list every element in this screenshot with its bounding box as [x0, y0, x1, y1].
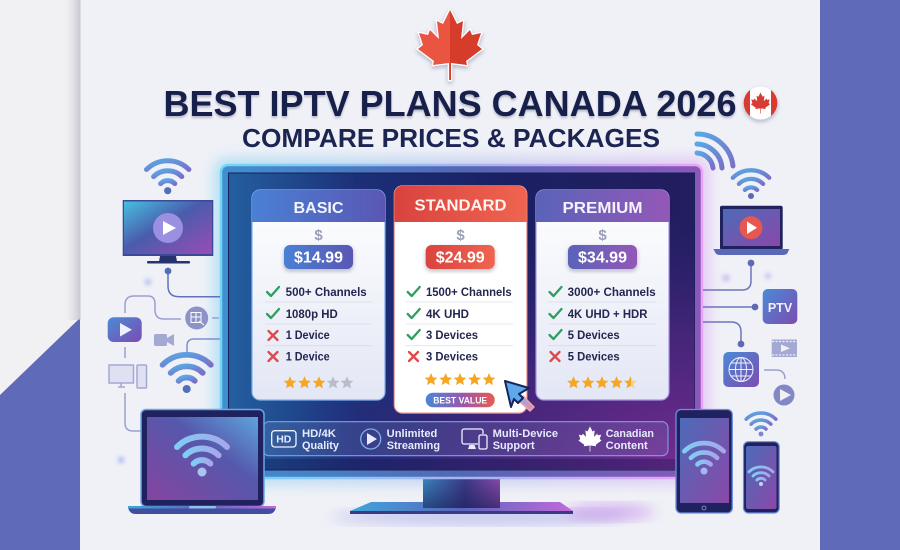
- premium name: PREMIUM: [562, 200, 642, 217]
- icon: phone: [744, 442, 779, 513]
- feature: canadian content: Canadian: [606, 428, 654, 440]
- panel: standard plan: [394, 186, 527, 413]
- icon: play circle: [774, 384, 794, 406]
- icon: wifi above laptop: [733, 170, 769, 199]
- feature: unlimited streaming: [361, 428, 440, 452]
- icon: globe badge: [185, 306, 208, 330]
- feature: multi-device support: Support: [493, 440, 535, 452]
- icon: maple leaf: [418, 10, 482, 80]
- basic features: 1080p HD: [286, 309, 338, 321]
- standard price: $24.99: [436, 250, 485, 266]
- icon: right laptop with play: [713, 206, 789, 255]
- feature: hd quality: HD: [276, 434, 292, 446]
- panel: basic plan: [252, 190, 385, 400]
- feature: unlimited streaming: Streaming: [387, 440, 440, 452]
- icon: wifi above tv: [146, 161, 189, 194]
- standard features: 4K UHD: [426, 309, 469, 321]
- basic features: 500+ Channels: [286, 287, 367, 299]
- basic name: BASIC: [294, 200, 344, 217]
- standard price: [426, 245, 495, 269]
- best value badge: BEST VALUE: [433, 395, 487, 405]
- feature: canadian content: Content: [606, 440, 648, 452]
- monitor stand: [350, 478, 573, 514]
- basic header: [252, 190, 385, 222]
- feature: hd quality: Quality: [302, 440, 340, 452]
- feature: hd quality: [272, 428, 340, 452]
- basic price: $14.99: [294, 250, 343, 266]
- premium dollar: $: [598, 227, 607, 244]
- basic features: 1 Device: [286, 352, 330, 364]
- standard name: STANDARD: [414, 198, 506, 215]
- premium price: $34.99: [578, 250, 627, 266]
- basic rating stars: [284, 376, 353, 388]
- basic dollar: $: [314, 227, 323, 244]
- icon: canadian flag badge: [744, 86, 777, 120]
- icon: left laptop: [128, 410, 276, 514]
- feature: unlimited streaming: Unlimited: [387, 428, 437, 440]
- connector lines: [125, 263, 785, 431]
- feature: hd quality: HD/4K: [302, 428, 336, 440]
- basic price: [284, 245, 353, 269]
- basic features: [265, 287, 372, 364]
- standard header: [394, 186, 527, 222]
- icon: video tile: [108, 317, 142, 342]
- standard features: [406, 287, 513, 364]
- feature: multi-device support: Multi-Device: [493, 428, 558, 440]
- icon: globe tile: [723, 352, 759, 387]
- premium features: 5 Devices: [568, 352, 620, 364]
- icon: tablet: [676, 410, 732, 513]
- premium features: 5 Devices: [568, 330, 620, 342]
- icon: camera: [154, 334, 174, 346]
- basic features: 1 Device: [286, 330, 330, 342]
- premium header: [536, 190, 669, 222]
- monitor glow: [214, 158, 709, 484]
- premium price: [568, 245, 637, 269]
- subtitle: COMPARE PRICES & PACKAGES: [242, 123, 660, 153]
- best value badge: [426, 393, 495, 407]
- monitor: [221, 165, 702, 478]
- icon: wifi lower left: [163, 355, 211, 393]
- panel: premium plan: [536, 190, 669, 400]
- connector dots: [118, 260, 770, 463]
- icon: ptv tile: PTV: [768, 301, 793, 315]
- premium features: 3000+ Channels: [568, 287, 656, 299]
- premium rating stars: [567, 376, 637, 388]
- standard rating stars: [425, 373, 495, 385]
- standard features: 3 Devices: [426, 330, 478, 342]
- icon: cursor arrow: [505, 381, 534, 411]
- standard features: 3 Devices: [426, 352, 478, 364]
- feature bar: [263, 422, 668, 456]
- feature: canadian content: [578, 426, 654, 452]
- icon: film strip: [772, 340, 797, 357]
- icon: desktop computer: [109, 365, 146, 388]
- standard dollar: $: [456, 227, 465, 244]
- icon: wifi above phone: [746, 413, 776, 436]
- standard features: 1500+ Channels: [426, 287, 512, 299]
- premium features: [548, 287, 656, 364]
- icon: ptv tile: [763, 289, 797, 324]
- feature: multi-device support: [462, 428, 558, 452]
- ground shadow: [330, 504, 655, 524]
- title: BEST IPTV PLANS CANADA 2026: [164, 83, 736, 124]
- icon: tv with play: [123, 200, 213, 264]
- icon: large wifi top right: [697, 134, 733, 168]
- premium features: 4K UHD + HDR: [568, 309, 648, 321]
